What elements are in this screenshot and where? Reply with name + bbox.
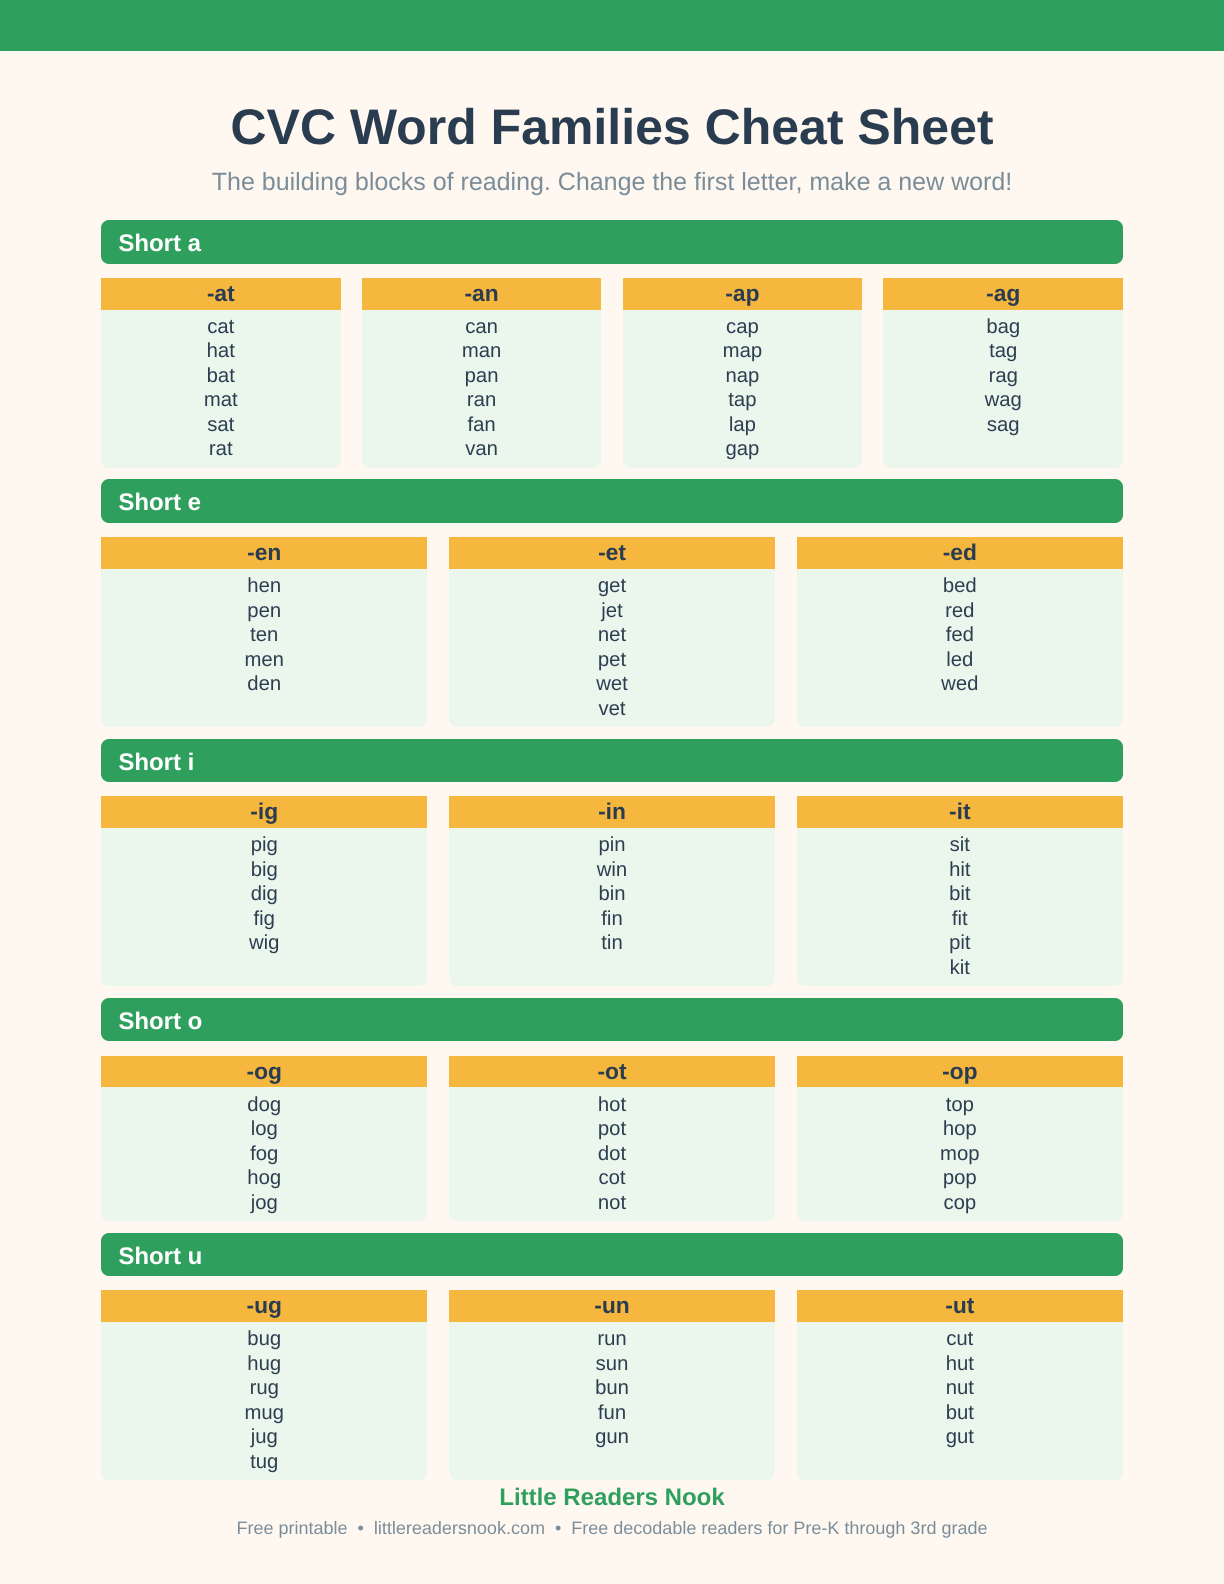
card: -an — [362, 278, 601, 468]
heading: Short o: Short o — [118, 1008, 202, 1035]
subtitle: The building blocks of reading. Change the first letter, make a new word! — [212, 168, 1012, 196]
card: -it — [797, 796, 1123, 986]
card: -ag: wag — [985, 389, 1022, 411]
card: -ot: -ot — [597, 1058, 627, 1084]
card: -ed: led — [946, 649, 973, 671]
panel: Short e — [101, 479, 1123, 727]
card: -ed — [797, 537, 1123, 727]
card: -ag — [883, 278, 1123, 468]
card: -ap — [623, 278, 862, 468]
panel: Short i — [101, 739, 1123, 986]
card: -et: get — [598, 575, 626, 597]
card: -op: pop — [943, 1167, 977, 1189]
card: -ig: -ig — [250, 798, 278, 824]
card: -un: fun — [598, 1402, 626, 1424]
card: -an: fan — [467, 414, 496, 436]
card: -en — [101, 537, 427, 727]
card: -ap: gap — [725, 438, 759, 460]
card: -it: -it — [949, 798, 971, 824]
word family columns: Short e — [101, 537, 1123, 727]
card: -og: jog — [251, 1192, 278, 1214]
title: CVC Word Families Cheat Sheet — [230, 98, 994, 154]
card: -at — [101, 278, 340, 468]
panel: Short o — [101, 998, 1123, 1221]
heading: Short o — [101, 998, 1123, 1041]
card: -og: -og — [246, 1058, 282, 1084]
card: -ot — [449, 1056, 775, 1221]
card: -et: vet — [598, 698, 626, 720]
card: -it: hit — [949, 859, 970, 881]
card: -ed: fed — [946, 624, 974, 646]
card: -an: man — [462, 340, 501, 362]
card: -ug: tug — [250, 1451, 278, 1473]
card: -ed: wed — [941, 673, 978, 695]
card: -og: fog — [250, 1143, 278, 1165]
card: -ed: red — [945, 600, 974, 622]
card: -ag: bag — [986, 316, 1020, 338]
card: -ap: -ap — [725, 280, 760, 306]
card: -op: top — [946, 1094, 974, 1116]
card: -op — [797, 1056, 1123, 1221]
card: -an: pan — [465, 365, 498, 387]
card: -ot: dot — [598, 1143, 626, 1165]
card: -in: pin — [598, 834, 626, 856]
card: -et: net — [598, 624, 626, 646]
card: -ug: mug — [244, 1402, 284, 1424]
card: -en: hen — [247, 575, 281, 597]
card: -an: -an — [464, 280, 499, 306]
card: -ap: map — [723, 340, 762, 362]
card: -at: sat — [207, 414, 234, 436]
card: -an: van — [465, 438, 498, 460]
card: -ut: nut — [946, 1377, 974, 1399]
card: -in — [449, 796, 775, 986]
card: -ut: -ut — [945, 1292, 974, 1318]
card: -et — [449, 537, 775, 727]
heading: Short i — [101, 739, 1123, 782]
card: -ed: bed — [943, 575, 977, 597]
card: -en: pen — [247, 600, 281, 622]
card: -ot: not — [598, 1192, 626, 1214]
card: -it: pit — [949, 932, 970, 954]
card: -at: cat — [207, 316, 234, 338]
card: -un: -un — [594, 1292, 630, 1318]
card: -ut — [797, 1290, 1123, 1480]
card: -ut: but — [946, 1402, 974, 1424]
word family columns: Short a — [101, 278, 1123, 468]
heading: Short i: Short i — [118, 749, 194, 776]
card: -it: fit — [952, 908, 968, 930]
card: -it: bit — [949, 883, 970, 905]
word family columns: Short o — [101, 1056, 1123, 1221]
card: -at: -at — [207, 280, 235, 306]
card: -et: wet — [596, 673, 628, 695]
heading: Short a — [101, 220, 1123, 264]
card: -op: cop — [943, 1192, 976, 1214]
card: -at: rat — [209, 438, 233, 460]
card: -ug: bug — [247, 1328, 281, 1350]
card: -in: bin — [598, 883, 626, 905]
card: -un: run — [597, 1328, 627, 1350]
word family columns: Short u — [101, 1290, 1123, 1480]
card: -it: kit — [950, 957, 970, 979]
footer note: Free printable • littlereadersnook.com • Free decodable readers for Pre-K through 3rd grade — [236, 1518, 988, 1538]
card: -en: men — [244, 649, 284, 671]
card: -ap: nap — [725, 365, 759, 387]
card: -ot: pot — [598, 1118, 626, 1140]
card: -ut: gut — [946, 1426, 974, 1448]
card: -op: mop — [940, 1143, 980, 1165]
heading: Short a: Short a — [118, 230, 201, 257]
card: -at: hat — [207, 340, 235, 362]
card: -ig: wig — [249, 932, 279, 954]
card: -it: sit — [950, 834, 970, 856]
card: -un: sun — [596, 1353, 628, 1375]
footer brand: Little Readers Nook — [499, 1484, 725, 1511]
card: -un: gun — [595, 1426, 629, 1448]
heading: Short u: Short u — [118, 1242, 202, 1270]
card: -og: dog — [247, 1094, 281, 1116]
card: -og: log — [251, 1118, 278, 1140]
card: -ot: hot — [598, 1094, 626, 1116]
card: -en: den — [247, 673, 281, 695]
card: -og: hog — [247, 1167, 281, 1189]
heading: Short u — [101, 1232, 1123, 1276]
card: -ug: -ug — [246, 1292, 282, 1318]
card: -in: -in — [598, 798, 626, 824]
card: -op: hop — [943, 1118, 977, 1140]
card: -in: fin — [601, 908, 623, 930]
heading: Short e: Short e — [118, 489, 201, 516]
card: -ot: cot — [598, 1167, 626, 1189]
card: -in: win — [597, 859, 627, 881]
card: -ag: rag — [989, 365, 1018, 387]
card: -en: -en — [247, 539, 281, 565]
heading: Short e — [101, 479, 1123, 523]
card: -et: pet — [598, 649, 626, 671]
card: -un — [449, 1290, 775, 1480]
card: -og — [101, 1056, 427, 1221]
card: -ag: tag — [989, 340, 1017, 362]
card: -et: -et — [598, 539, 626, 565]
card: -ap: lap — [729, 414, 756, 436]
card: -un: bun — [595, 1377, 629, 1399]
card: -ig — [101, 796, 427, 986]
card: -ut: cut — [946, 1328, 973, 1350]
card: -ug: rug — [250, 1377, 279, 1399]
panel: Short u — [101, 1233, 1123, 1480]
card: -ig: dig — [251, 883, 278, 905]
card: -at: mat — [204, 389, 238, 411]
card: -ed: -ed — [943, 539, 977, 565]
card: -an: ran — [467, 389, 496, 411]
card: -et: jet — [601, 600, 623, 622]
panel: Short a — [101, 220, 1123, 468]
card: -ug: hug — [247, 1353, 281, 1375]
card: -ig: fig — [254, 908, 275, 930]
card: -ug — [101, 1290, 427, 1480]
card: -en: ten — [250, 624, 278, 646]
word family columns: Short i — [101, 796, 1123, 986]
card: -ap: cap — [726, 316, 759, 338]
top banner — [0, 0, 1224, 51]
card: -ug: jug — [251, 1426, 278, 1448]
card: -ag: sag — [987, 414, 1020, 436]
card: -ap: tap — [728, 389, 756, 411]
card: -ig: pig — [251, 834, 278, 856]
card: -ag: -ag — [986, 280, 1020, 306]
card: -ig: big — [251, 859, 278, 881]
card: -ut: hut — [946, 1353, 974, 1375]
card: -op: -op — [942, 1058, 978, 1084]
card: -in: tin — [601, 932, 623, 954]
card: -an: can — [465, 316, 498, 338]
card: -at: bat — [207, 365, 235, 387]
